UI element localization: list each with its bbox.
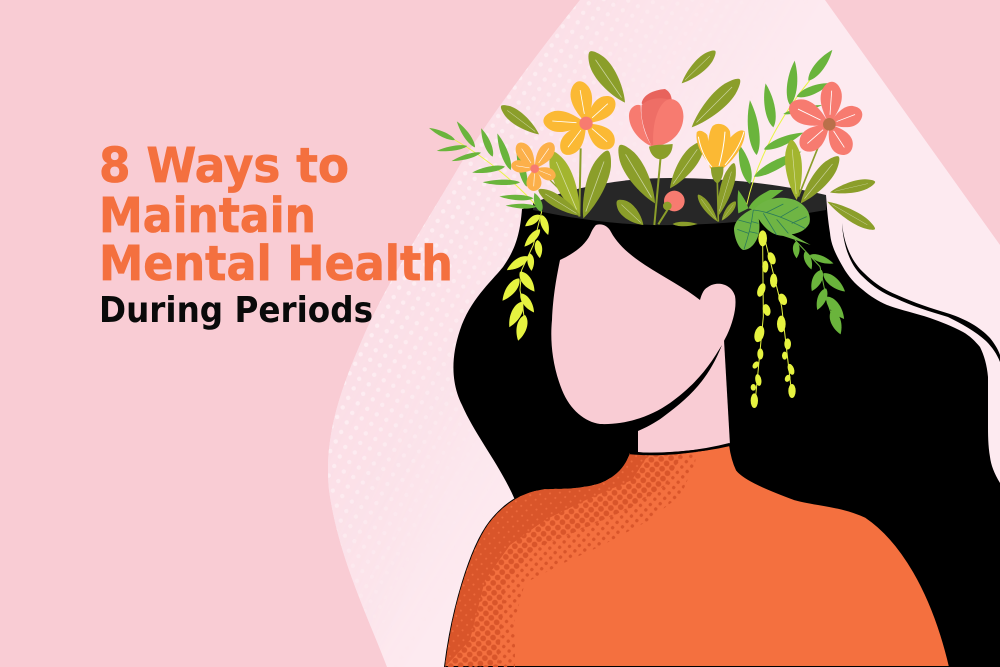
neckline (630, 444, 730, 454)
stems (548, 147, 818, 225)
heading line 2: Maintain (99, 188, 316, 244)
yellow tulip (696, 124, 745, 183)
halftone shading (440, 450, 697, 667)
yellow flower (543, 79, 620, 160)
face (551, 224, 736, 424)
olive leaves (497, 46, 878, 234)
coral flower (785, 81, 865, 160)
green right vine (793, 240, 848, 336)
heading line 1: 8 Ways to (99, 138, 349, 194)
heading line 3: Mental Health (99, 236, 453, 292)
yellow left vine (499, 212, 552, 342)
figure: face and neck (551, 224, 736, 453)
drop shape backdrop (328, 0, 1000, 667)
coral tulip (629, 89, 683, 159)
vines and large leaf (499, 190, 848, 408)
left sprig (428, 120, 545, 213)
yellow drooping strands (751, 230, 796, 408)
right sprig (735, 47, 836, 205)
large leaf (734, 190, 811, 250)
title (99, 138, 453, 331)
crown of open head (533, 178, 826, 225)
coral bud (663, 191, 685, 211)
neck (638, 340, 730, 453)
shoulders (445, 445, 950, 667)
orange top (440, 444, 950, 667)
neck shadow (600, 345, 722, 431)
hair (445, 195, 1000, 667)
flower crown (428, 46, 878, 234)
subheading: During Periods (99, 290, 373, 331)
small orange flower (510, 139, 559, 191)
thin hair strand line (842, 223, 1000, 362)
